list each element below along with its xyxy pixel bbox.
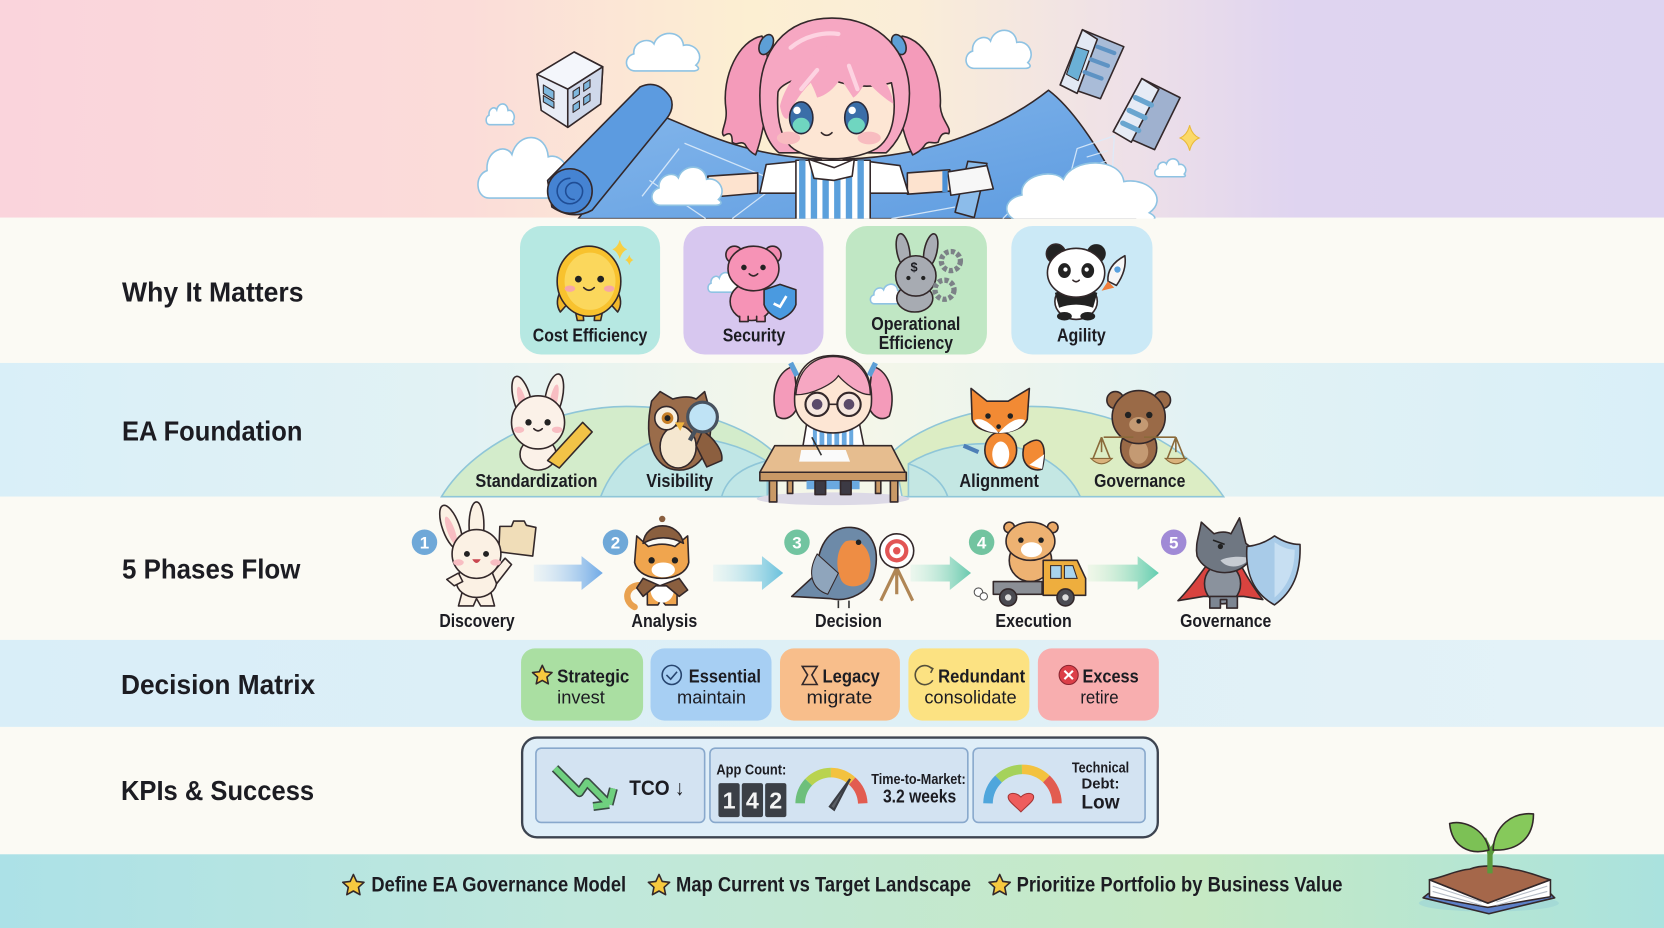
icon: grey bunny with gears [870, 233, 960, 312]
gauge 1 [800, 773, 863, 810]
tile: app count and time to market: App Count: [716, 763, 786, 779]
diagram: 5 phases flow [412, 502, 1300, 631]
icon: star 2 [648, 874, 670, 895]
icon: target [880, 534, 914, 601]
left hand cloud [652, 167, 722, 205]
character: main girl [652, 18, 993, 224]
label: Efficiency [879, 333, 953, 353]
icon: heart pointer [1008, 793, 1034, 812]
icon: pink bear with shield [708, 246, 796, 322]
phase 4 execution [969, 522, 1086, 631]
counter 142: 4 [746, 788, 759, 814]
number badge 4: 4 [977, 534, 987, 553]
icon: building right top [1060, 30, 1124, 99]
text 1: Define EA Governance Model [371, 873, 626, 896]
label: Decision [815, 611, 882, 631]
icon: building right lower [1113, 79, 1180, 150]
hero illustration [478, 18, 1199, 224]
card: excess [1038, 648, 1159, 721]
tile: app count and time to market: Time-to-Market: [871, 772, 966, 788]
sleeves [760, 161, 908, 193]
left leaf [1450, 823, 1489, 852]
text 3: Prioritize Portfolio by Business Value [1017, 873, 1343, 896]
eyes [790, 102, 868, 134]
icon: panda with rocket [1046, 244, 1125, 320]
character: bunny [435, 502, 512, 606]
panel: why it matters cards [520, 226, 1152, 354]
card: cost efficiency [520, 226, 660, 354]
arrow 4 to 5 [1088, 556, 1159, 590]
band: decision matrix background [0, 640, 1664, 727]
cheeks and mouth [777, 132, 881, 144]
tile: technical debt [973, 748, 1145, 822]
label [871, 314, 960, 353]
blueprint roll [548, 84, 672, 215]
blueprint sheet [548, 84, 1136, 219]
right arches [894, 406, 1224, 497]
character: hamster in truck [974, 522, 1086, 606]
number badge 5: 5 [1169, 534, 1178, 553]
phase 2 analysis [603, 516, 697, 631]
character: alignment fox [964, 388, 1044, 470]
card: strategic: invest [557, 687, 606, 708]
diagram: EA foundation arches [441, 356, 1224, 505]
neck and arms [708, 157, 951, 197]
card: essential [651, 648, 772, 721]
icon: cloud top right [966, 30, 1031, 68]
blueprint roll spiral [548, 169, 592, 213]
fringe [780, 70, 894, 119]
band: header background [0, 0, 1664, 219]
label: Security [723, 326, 785, 346]
number badge 1: 1 [420, 534, 429, 553]
card: legacy: Legacy [822, 665, 880, 686]
icon: hourglass [802, 666, 817, 684]
icon: cross circle [1059, 665, 1078, 684]
label: Analysis [631, 611, 697, 631]
arrow 2 to 3 [713, 556, 783, 590]
character: detective cat [627, 516, 689, 607]
icon: sparkle [1180, 125, 1199, 151]
heading: Why It Matters: Why It Matters [122, 276, 304, 307]
hair pigtail right [896, 36, 949, 155]
character: visibility owl [649, 392, 722, 470]
card: agility [1011, 226, 1152, 354]
hair strands [791, 33, 857, 89]
stem [1484, 838, 1498, 873]
collar [809, 159, 854, 180]
card: legacy [780, 648, 900, 721]
phase 5 governance [1161, 518, 1300, 631]
icon: coin character [557, 240, 634, 320]
heading: 5 Phases Flow: 5 Phases Flow [122, 553, 301, 584]
icon: star 3 [989, 874, 1010, 895]
icon: book with sprout [1419, 814, 1559, 914]
icon: cloud right big [1007, 163, 1157, 222]
hair pigtail left [723, 36, 768, 155]
label: Operational [871, 314, 960, 334]
character: governance bear [1091, 391, 1186, 468]
card: strategic: Strategic [557, 665, 629, 686]
card: excess: retire [1080, 687, 1119, 708]
card: redundant [908, 648, 1029, 721]
heading: KPIs and Success: KPIs & Success [121, 775, 314, 806]
icon: grey bunny with gears: $ [911, 260, 918, 275]
soil [1429, 866, 1550, 903]
icon: shield [1247, 536, 1300, 605]
gauge 2 [988, 769, 1057, 803]
character: robin [792, 527, 876, 608]
heading: EA Foundation: EA Foundation [122, 415, 302, 446]
right glove and small roll [942, 161, 993, 218]
band: 5 phases background [0, 497, 1664, 640]
labels: Alignment [959, 471, 1039, 491]
character: standardization bunny [508, 372, 592, 470]
text 2: Map Current vs Target Landscape [676, 873, 971, 896]
panel: decision matrix cards [521, 648, 1159, 721]
tile: technical debt: Low [1081, 793, 1120, 814]
icon: cloud small left [486, 104, 514, 125]
label: Cost Efficiency [533, 326, 647, 346]
right leaf [1493, 814, 1533, 850]
label: Governance [1180, 611, 1271, 631]
apron [796, 160, 870, 224]
card: legacy: migrate [807, 687, 872, 708]
band: footer background [0, 854, 1664, 928]
labels: Governance [1094, 471, 1185, 491]
tile: technical debt: Debt: [1082, 776, 1119, 792]
left arches [441, 406, 773, 497]
card: security [683, 226, 824, 354]
tile: TCO: TCO ↓ [629, 777, 684, 800]
icon: star 1 [343, 874, 364, 895]
icon: cloud top left [626, 33, 700, 71]
icon: check circle [662, 665, 681, 684]
labels [475, 471, 1185, 491]
dashboard frame [522, 738, 1158, 837]
arrow 1 to 2 [534, 556, 603, 590]
phase 3 decision [784, 527, 914, 631]
tile: app count and time to market [710, 748, 968, 822]
panel: KPI dashboard [522, 738, 1158, 837]
labels: Standardization [475, 471, 597, 491]
blueprint drawing lines [642, 136, 1114, 219]
icon: merge arrows [915, 666, 933, 685]
icon: folder [499, 521, 536, 556]
tile: technical debt: Technical [1072, 761, 1129, 777]
desk [760, 446, 905, 472]
label: Execution [995, 611, 1072, 631]
counter 142: 1 [723, 788, 736, 814]
card: strategic [521, 648, 643, 721]
character: wolf with shield [1178, 518, 1263, 608]
card: redundant: consolidate [924, 687, 1017, 708]
labels: Visibility [646, 471, 713, 491]
band: why it matters background [0, 218, 1664, 363]
number badge 2: 2 [611, 534, 620, 553]
hair bows [758, 34, 907, 56]
heading: Decision Matrix: Decision Matrix [121, 669, 316, 700]
arrow 3 to 4 [911, 556, 971, 590]
book pages [1429, 880, 1550, 907]
band: KPIs background [0, 727, 1664, 854]
book cover [1423, 894, 1555, 914]
card: essential: Essential [689, 665, 761, 686]
label: Agility [1057, 326, 1106, 346]
counter 142 [718, 783, 786, 817]
band: EA foundation background [0, 363, 1664, 497]
face [778, 70, 894, 159]
label: Discovery [439, 611, 515, 631]
icon: cloud left big [478, 138, 568, 198]
card: redundant: Redundant [938, 665, 1025, 686]
icon: building left [537, 52, 603, 127]
card: excess: Excess [1082, 665, 1139, 686]
blueprint paper [578, 90, 1136, 219]
page lines [1433, 886, 1547, 905]
number badge 3: 3 [792, 534, 802, 553]
tile: app count and time to market: 3.2 weeks [883, 786, 956, 806]
tile: TCO [536, 748, 705, 822]
card: essential: maintain [677, 687, 746, 708]
icon: cloud small right [1155, 159, 1186, 177]
card: operational efficiency [846, 226, 987, 354]
footer action items [343, 873, 1343, 896]
icon: down trend arrow [555, 768, 613, 807]
icon: star [533, 665, 552, 684]
character: girl at desk [757, 356, 909, 505]
hair back and head [760, 18, 909, 153]
counter 142: 2 [769, 788, 782, 814]
phase 1 discovery [412, 502, 536, 631]
